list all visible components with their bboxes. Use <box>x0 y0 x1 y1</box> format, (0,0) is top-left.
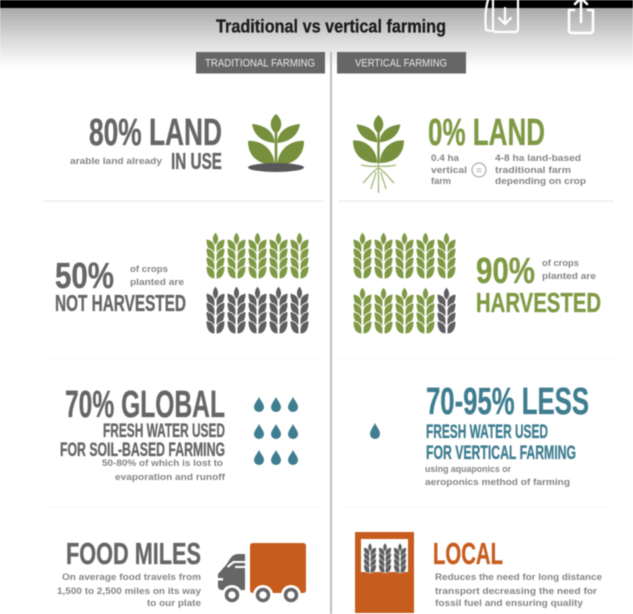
text: vertical farm size: 0.4 ha <box>431 153 460 163</box>
text: of crops planted are: planted are <box>542 271 596 281</box>
text: local note: fossil fuel and ensuring quality <box>435 598 583 608</box>
heading: local: LOCAL <box>433 536 503 571</box>
icon: equals circle <box>472 163 486 177</box>
icon: green wheat row <box>353 232 456 279</box>
subheading: not harvested: NOT HARVESTED <box>55 290 186 316</box>
column header: traditional farming: TRADITIONAL FARMING <box>205 58 315 70</box>
text: traditional farm size: 4-8 ha land-based <box>495 153 581 163</box>
icon: share <box>569 0 593 33</box>
subheading: fresh water used: FRESH WATER USED <box>103 421 225 442</box>
icon: save to files <box>485 0 518 32</box>
heading: 90%: 90% <box>476 250 535 291</box>
text: arable land already: arable land already <box>70 156 162 166</box>
text: water lost note: 50-80% of which is lost to <box>102 458 224 468</box>
text: of crops planted are: of crops <box>130 264 168 274</box>
center divider <box>330 52 332 614</box>
icon: plant with roots <box>353 115 404 193</box>
text: farming method note <box>425 464 570 487</box>
text: food miles note: to our plate <box>147 598 201 608</box>
icon: local farm building <box>355 532 414 613</box>
column header: vertical farming: VERTICAL FARMING <box>355 58 447 70</box>
icon: plant on soil <box>248 114 304 172</box>
panel: vertical land <box>353 112 587 193</box>
panel: vertical harvest <box>353 232 601 334</box>
text: traditional farm size: traditional farm <box>495 165 571 175</box>
icon: green wheat row <box>206 232 309 279</box>
panel: traditional land <box>70 112 304 174</box>
icon: grey wheat row <box>206 286 309 334</box>
text: food miles note <box>57 572 201 608</box>
section rules <box>44 200 614 507</box>
subheading: fresh water used: FRESH WATER USED <box>426 422 548 443</box>
heading: 80% land: 80% LAND <box>89 112 222 154</box>
text: water lost note: evaporation and runoff <box>115 472 226 482</box>
heading: 50%: 50% <box>55 255 114 296</box>
icon: single water drop <box>370 423 380 439</box>
text: of crops planted are <box>542 258 596 281</box>
icon: truck <box>217 543 306 605</box>
text: vertical farm size: farm <box>431 176 451 186</box>
text: water lost note <box>102 458 226 482</box>
header gradient <box>0 8 633 68</box>
text: local note: transport decreasing the need for <box>435 586 598 596</box>
panel: traditional harvest <box>55 232 309 334</box>
text: food miles note: 1,500 to 2,500 miles on its way <box>57 586 201 596</box>
subheading: in use: IN USE <box>171 148 222 174</box>
text: of crops planted are <box>130 264 184 287</box>
top status band <box>0 0 633 8</box>
panel: local <box>355 532 602 613</box>
title: Traditional vs vertical farming <box>216 16 446 36</box>
text: local note: Reduces the need for long distance <box>435 572 602 582</box>
column header: vertical farming <box>337 52 466 74</box>
text: traditional farm size <box>495 153 587 186</box>
subheading: for soil-based farming: FOR SOIL-BASED FARMING <box>60 440 225 461</box>
column header: traditional farming <box>196 52 325 74</box>
text: of crops planted are: planted are <box>130 277 184 287</box>
panel: traditional water <box>60 384 298 482</box>
icon: nine water drops <box>254 397 298 465</box>
text: farming method note: using aquaponics or <box>425 464 511 474</box>
heading: 0% land: 0% LAND <box>428 112 545 154</box>
heading: 70% global: 70% GLOBAL <box>65 384 225 426</box>
panel: vertical water <box>370 381 589 487</box>
text: traditional farm size: depending on crop <box>495 176 587 186</box>
panel: food miles <box>57 536 306 608</box>
text: food miles note: On average food travels from <box>62 572 201 582</box>
text: farming method note: aeroponics method of farming <box>425 477 570 487</box>
text: local note <box>435 572 602 608</box>
text: vertical farm size <box>431 153 467 186</box>
text: vertical farm size: vertical <box>431 165 467 175</box>
heading: food miles: FOOD MILES <box>66 536 201 571</box>
icon: mostly green wheat row <box>353 287 456 334</box>
text: of crops planted are: of crops <box>542 258 579 268</box>
